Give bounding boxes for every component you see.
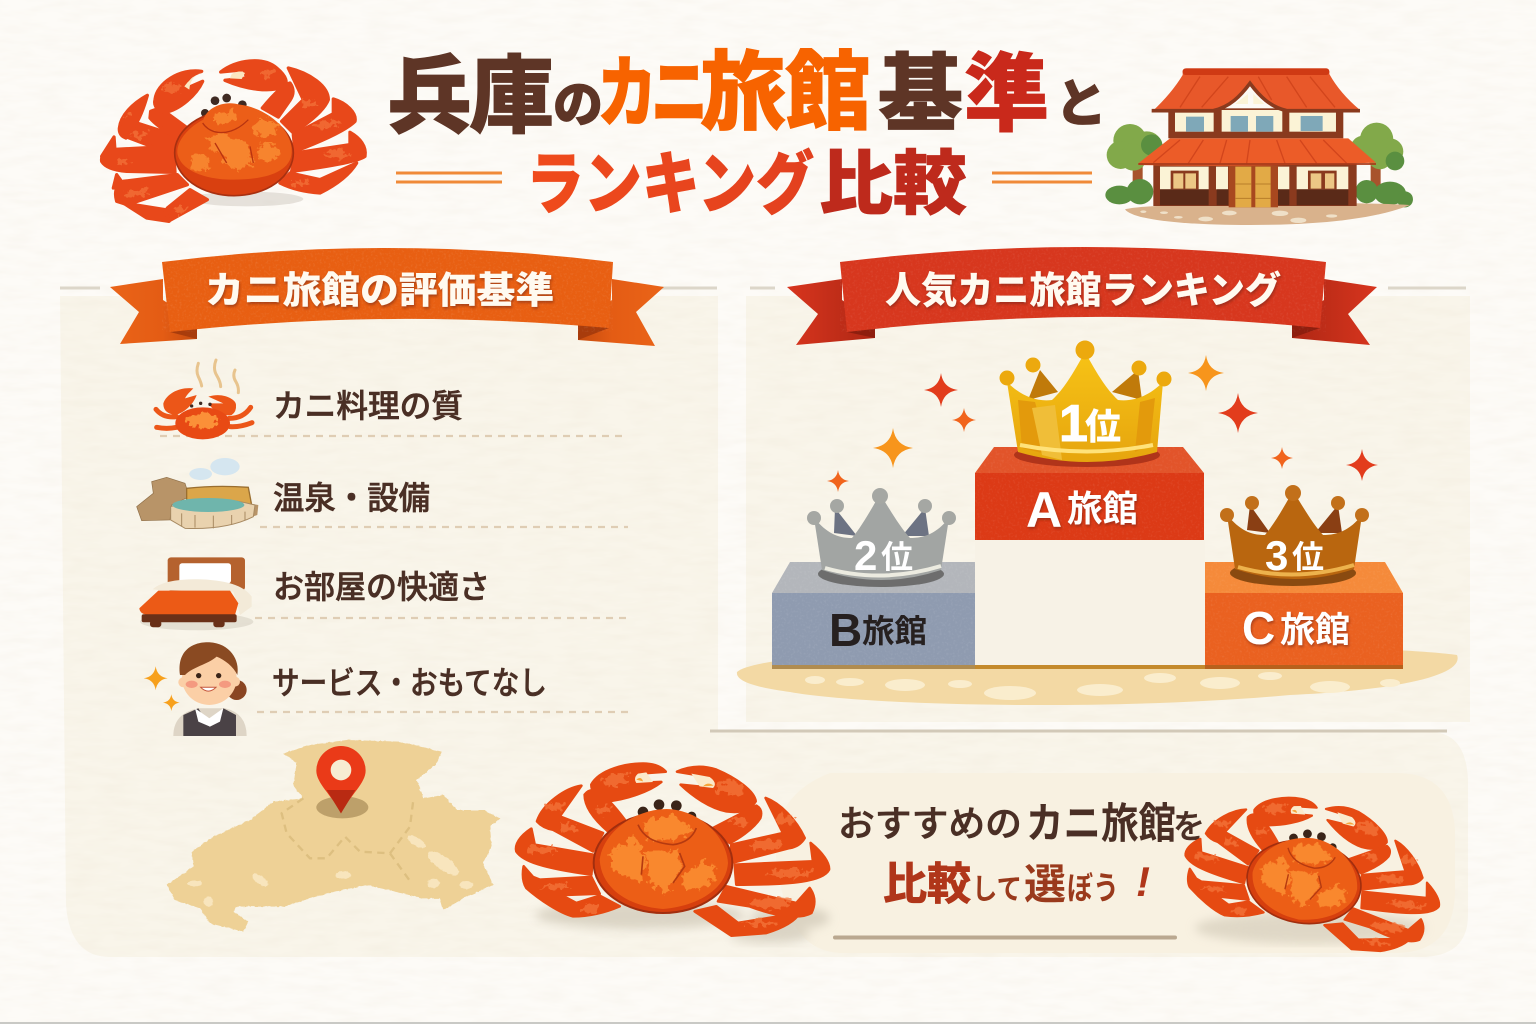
title: 旅館 (700, 45, 871, 141)
title: カ (597, 49, 657, 137)
crown: 2nd place: 位 (881, 539, 913, 575)
icon: large crab (516, 764, 830, 943)
title: と (1055, 76, 1107, 134)
callout text line 2: 選 (1024, 861, 1066, 908)
podium block: C ryokan: C (1242, 602, 1275, 654)
callout text line 2: ぼう (1067, 870, 1119, 906)
heading ribbon: evaluation criteria (110, 248, 664, 346)
sparkles (827, 355, 1378, 492)
title (387, 45, 1107, 223)
podium block: B ryokan: 旅館 (862, 613, 927, 649)
callout: compare and choose (776, 773, 1455, 953)
ground (737, 645, 1458, 705)
callout text line 1 (838, 800, 1205, 847)
podium block: C ryokan (1205, 562, 1403, 669)
heading ribbon: ranking (787, 247, 1377, 345)
podium chart (737, 340, 1458, 705)
crown: 1st place: 1 (1059, 395, 1088, 453)
crown: 3rd place: 3 (1265, 532, 1288, 579)
callout text line 1: を (1173, 808, 1205, 845)
criterion: service: サービス・おもてなし (272, 665, 547, 701)
icon: staff woman (144, 642, 247, 736)
callout text line 2: して (972, 874, 1022, 906)
podium block: B ryokan (772, 562, 975, 669)
crown: 1st place (1000, 340, 1172, 467)
icon: header crab (102, 61, 365, 221)
title: ランキング (526, 147, 814, 223)
callout text line 2: 比較 (883, 860, 971, 909)
callout text line 1: カニ旅館 (1026, 800, 1176, 847)
podium block: A ryokan: A (1026, 482, 1062, 538)
heading text: 人気カニ旅館ランキング (885, 269, 1281, 311)
podium block: B ryokan: B (829, 604, 862, 656)
heading text: カニ旅館の評価基準 (205, 270, 554, 311)
callout text line 2 (883, 858, 1150, 909)
crown: 3rd place (1220, 485, 1369, 586)
criteria list (137, 360, 628, 736)
title: の (553, 77, 603, 133)
map of Hyogo with pin (167, 740, 500, 932)
title: 基 (878, 48, 963, 143)
criterion: crab cuisine: カニ料理の質 (273, 388, 463, 424)
crown: 2nd place: 2 (854, 532, 877, 579)
icon: bed (139, 557, 253, 630)
title: 比較 (819, 145, 967, 223)
icon: steamed crab (156, 360, 252, 439)
podium block: C ryokan: 旅館 (1280, 611, 1350, 650)
title: 兵庫 (387, 50, 554, 145)
callout text line 1: おすすめの (838, 803, 1022, 844)
title: ニ (651, 49, 708, 137)
callout text line 2: ! (1136, 858, 1150, 905)
panel: ranking background (746, 296, 1470, 722)
criterion: hot spring: 温泉・設備 (273, 480, 430, 516)
panel: left criteria and bottom background (60, 296, 1468, 957)
criterion: room comfort: お部屋の快適さ (273, 569, 490, 605)
crown: 3rd place: 位 (1292, 539, 1324, 575)
icon: hot spring (137, 458, 258, 529)
crown: 2nd place (807, 488, 956, 587)
title: 準 (964, 48, 1049, 143)
icon: ryokan building (1105, 68, 1413, 225)
podium block: A ryokan (975, 447, 1205, 669)
icon: right crab (1176, 784, 1451, 960)
podium block: A ryokan: 旅館 (1067, 488, 1138, 529)
crown: 1st place: 位 (1085, 406, 1121, 447)
